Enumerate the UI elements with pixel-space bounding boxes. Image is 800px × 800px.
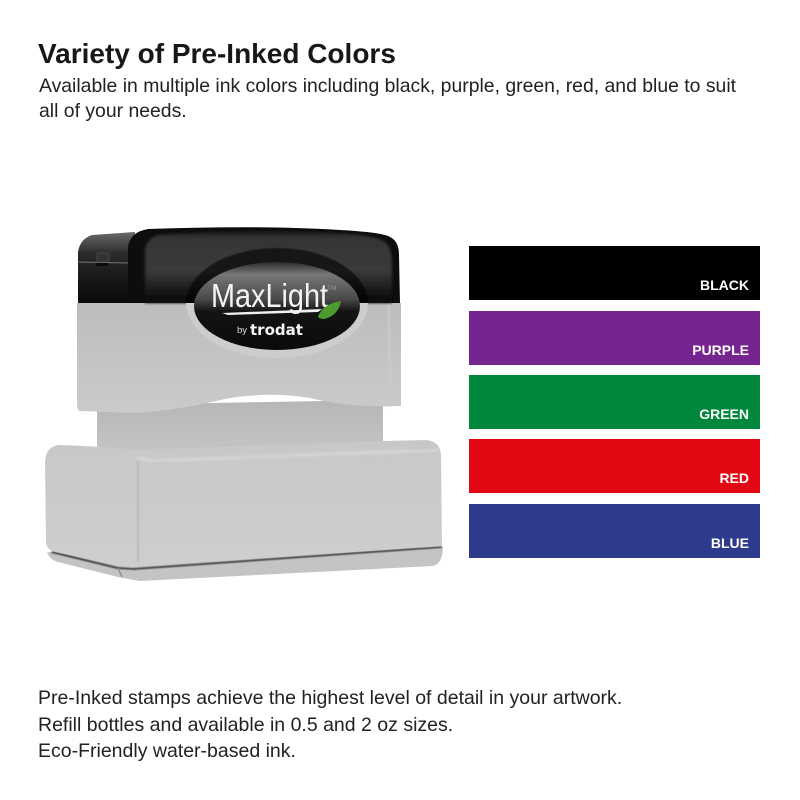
swatch: green: GREEN	[699, 406, 749, 422]
logo oval	[186, 248, 368, 358]
footer text: Eco-Friendly water-based ink.	[38, 740, 296, 762]
stamp neck	[97, 400, 383, 452]
logo brand: trodat	[250, 321, 304, 339]
intro text: all of your needs.	[39, 100, 187, 122]
stamp grey body	[77, 303, 401, 413]
footer text: Refill bottles and available in 0.5 and 2 oz sizes.	[38, 714, 453, 736]
swatch: blue: BLUE	[711, 535, 749, 551]
swatch: purple	[469, 311, 760, 365]
stamp base	[45, 440, 442, 567]
swatch: blue	[469, 504, 760, 558]
swatch: black: BLACK	[700, 277, 749, 293]
footer text	[38, 687, 622, 762]
logo leaf	[318, 301, 341, 319]
stamp black cap	[78, 227, 400, 303]
swatch: red	[469, 439, 760, 493]
swatch: red: RED	[719, 470, 749, 486]
swatch: green	[469, 375, 760, 429]
logo by: by	[237, 325, 247, 336]
title: Variety of Pre-Inked Colors	[38, 38, 396, 69]
logo trademark: TM	[327, 285, 336, 292]
footer text: Pre-Inked stamps achieve the highest level of detail in your artwork.	[38, 687, 622, 709]
swatch: purple: PURPLE	[692, 342, 749, 358]
intro text: Available in multiple ink colors including black, purple, green, red, and blue to suit	[39, 75, 736, 97]
stamp base plate	[47, 545, 443, 581]
swatch: black	[469, 246, 760, 300]
intro text	[39, 75, 736, 122]
logo wordmark: MaxLight	[211, 277, 328, 314]
